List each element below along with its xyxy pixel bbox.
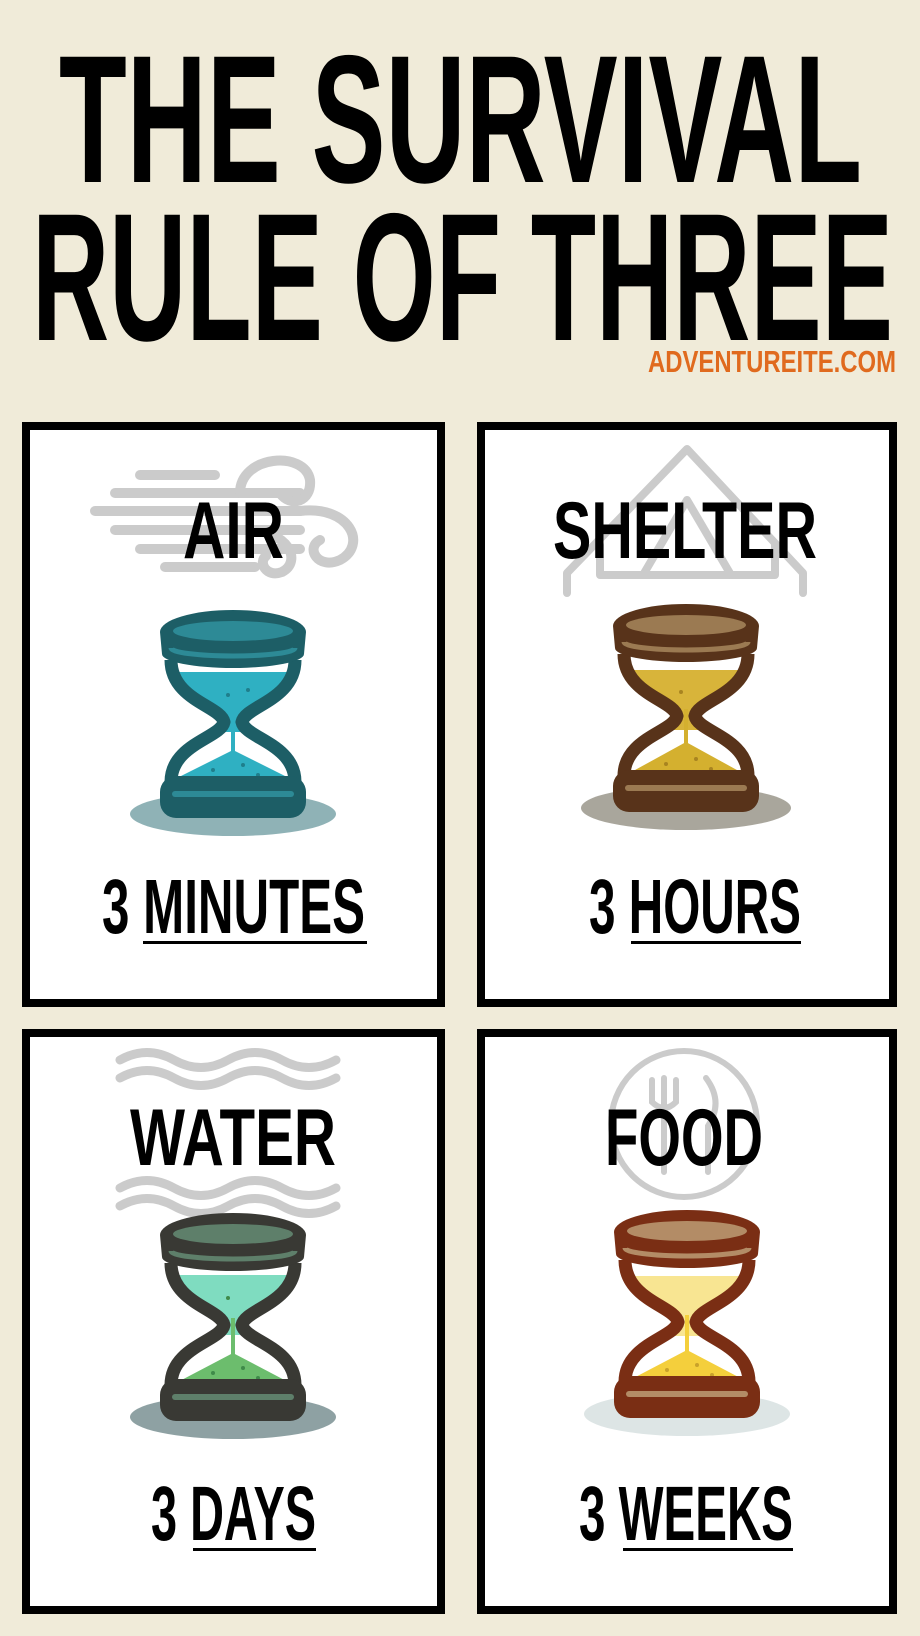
panel: shelter [481, 426, 893, 1003]
icon: tent [567, 449, 803, 593]
panel: water [26, 1033, 441, 1610]
panel: food [481, 1033, 893, 1610]
icon: wind [95, 461, 353, 573]
title [32, 17, 893, 379]
icon: hourglass brown [581, 604, 791, 830]
icon: hourglass teal [130, 610, 336, 836]
icon: hourglass green [130, 1213, 336, 1439]
heading: SHELTER: SHELTER [553, 486, 817, 576]
icon: hourglass rust [584, 1210, 790, 1436]
label: 3 weeks [579, 1471, 793, 1557]
label: 3 minutes [102, 864, 367, 950]
heading: WATER: WATER [130, 1093, 336, 1183]
label: 3 days: 3 DAYS [151, 1471, 316, 1557]
icon: waves [120, 1052, 336, 1214]
label: 3 weeks: 3 WEEKS [579, 1471, 793, 1557]
heading: AIR: AIR [183, 486, 284, 576]
icon: plate and cutlery [611, 1051, 757, 1197]
label: 3 minutes: 3 MINUTES [102, 864, 365, 950]
label: 3 days [151, 1471, 316, 1557]
label: 3 hours [589, 864, 801, 950]
panel: air [26, 426, 441, 1003]
heading: FOOD: FOOD [605, 1093, 763, 1183]
